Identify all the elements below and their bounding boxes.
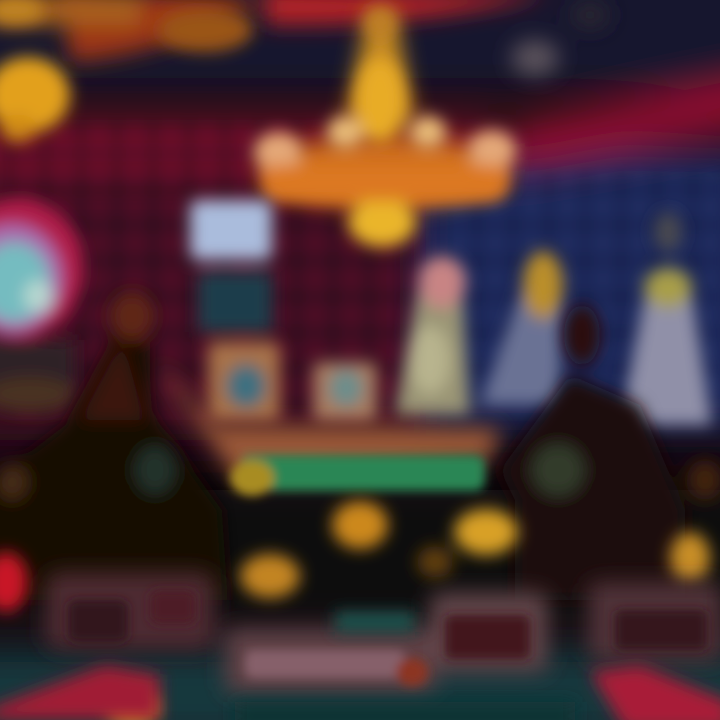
icon: gold coins <box>106 501 710 720</box>
icon: central chandelier <box>254 8 516 247</box>
icon: top-left chandelier <box>0 0 253 142</box>
icon: left player silhouette <box>0 292 228 600</box>
icon: rainbow arch <box>0 198 84 413</box>
ceiling arcs <box>0 0 610 76</box>
icon: bottle figures <box>395 212 712 425</box>
icon: right player silhouette <box>500 305 720 600</box>
icon: red light <box>0 552 28 612</box>
panel: window and slot machines <box>190 200 377 422</box>
panel: chip stacks <box>45 572 720 693</box>
panel: floor <box>0 612 720 720</box>
panel: poker table <box>155 360 500 496</box>
wall texture <box>0 120 720 420</box>
